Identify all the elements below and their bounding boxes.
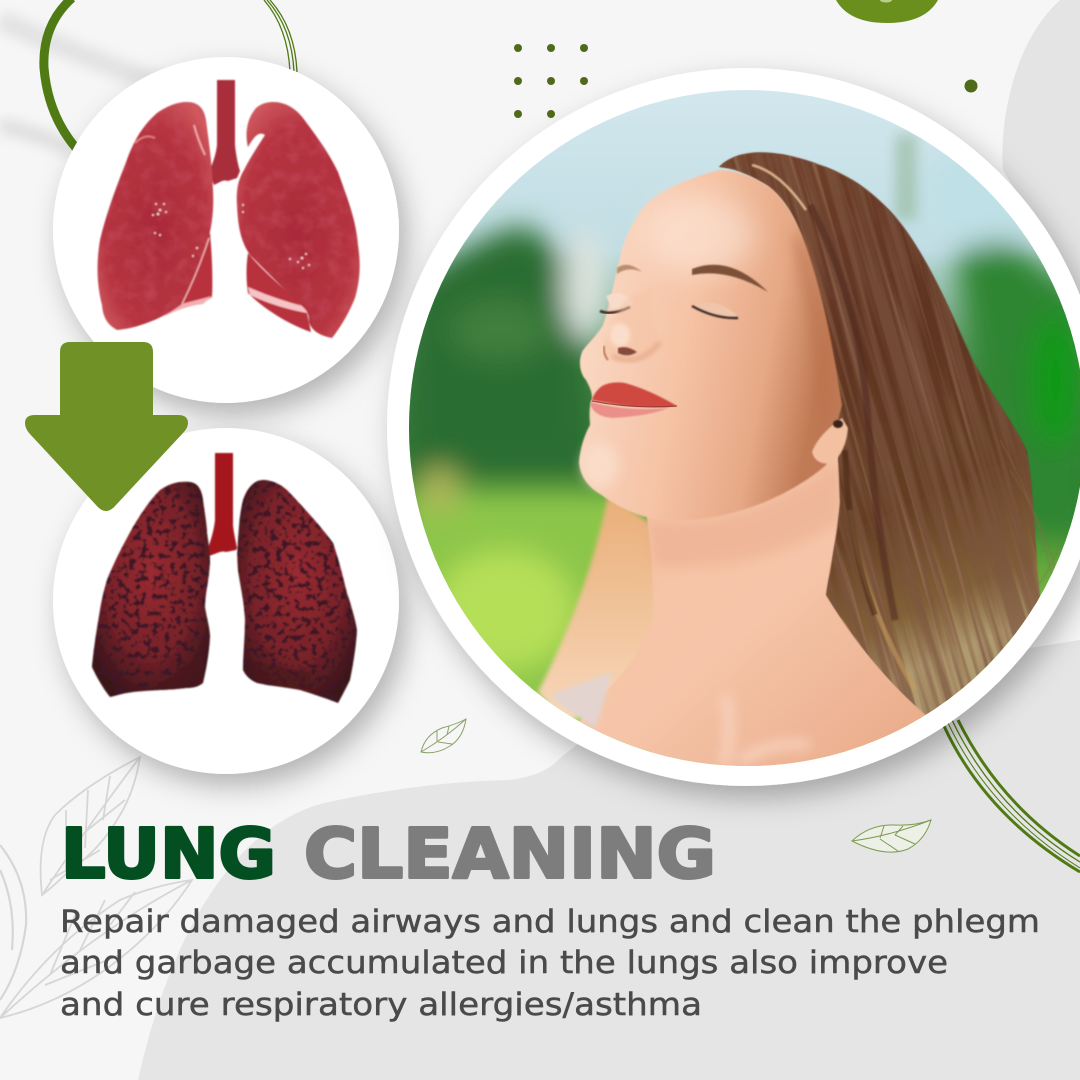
hair [718,151,1060,715]
dot grid [514,44,588,118]
small leaf: right [852,820,931,852]
body text: Repair damaged airways and lungs and clean the phlegm [60,904,1040,940]
panel: healthy lungs circle [53,57,399,403]
green semicircle: top [836,0,938,23]
panel: woman breathing photo [380,64,1080,812]
ring: bottom right [944,720,1080,872]
background blob: top right [1002,0,1080,300]
title: LUNG [61,814,276,894]
lips [592,382,677,407]
title: CLEANING [304,814,716,894]
ear [812,418,848,464]
eye lids and lashes [697,303,737,317]
photo background [400,85,1080,775]
panel: damaged lungs circle [53,428,399,774]
body text: and cure respiratory allergies/asthma [60,987,702,1023]
body text [60,904,1040,1023]
arrow: down [25,342,188,511]
blonde hair behind neck [538,495,660,725]
background blob: bottom [138,640,1080,1080]
ring: top left [44,0,297,148]
body text: and garbage accumulated in the lungs also improve [60,945,948,981]
dress strap [550,672,612,728]
small leaf: centre [421,719,466,753]
single dot [964,80,978,92]
decorative leaves: left [0,757,192,1018]
brow [692,265,768,292]
illustration: healthy lungs [90,80,365,345]
neck and chest [580,456,941,766]
title [61,814,716,894]
illustration: damaged lungs [88,453,360,707]
nose [604,298,638,356]
face [579,170,842,520]
